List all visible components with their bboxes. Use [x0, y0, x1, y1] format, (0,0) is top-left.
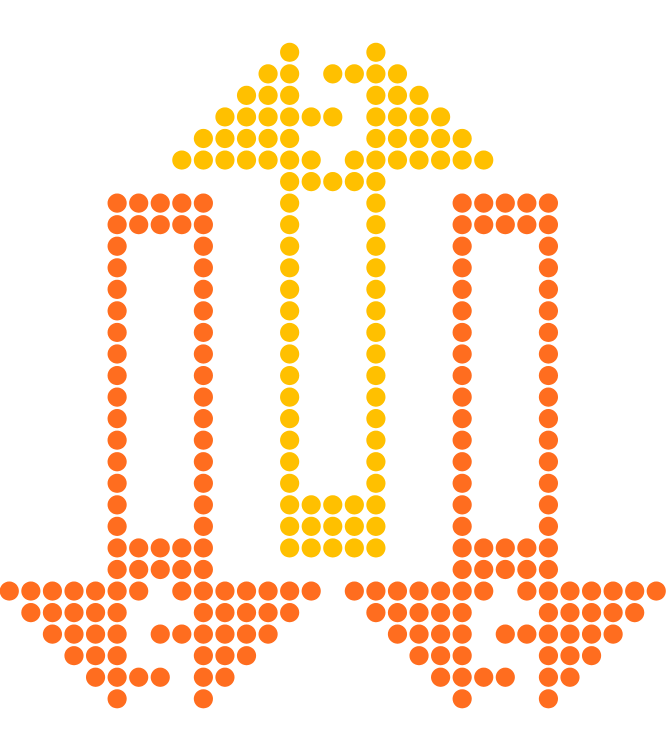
right arrow shaft: [462, 203, 548, 570]
right arrowhead: [354, 591, 656, 699]
yellow arrow shaft: [290, 182, 376, 548]
icon: right orange down arrow: [354, 203, 656, 699]
icon: left orange down arrow: [9, 203, 311, 699]
yellow arrowhead: [182, 52, 484, 160]
icon: central yellow up arrow: [182, 52, 484, 548]
left arrowhead: [9, 591, 311, 699]
left arrow shaft: [117, 203, 203, 570]
